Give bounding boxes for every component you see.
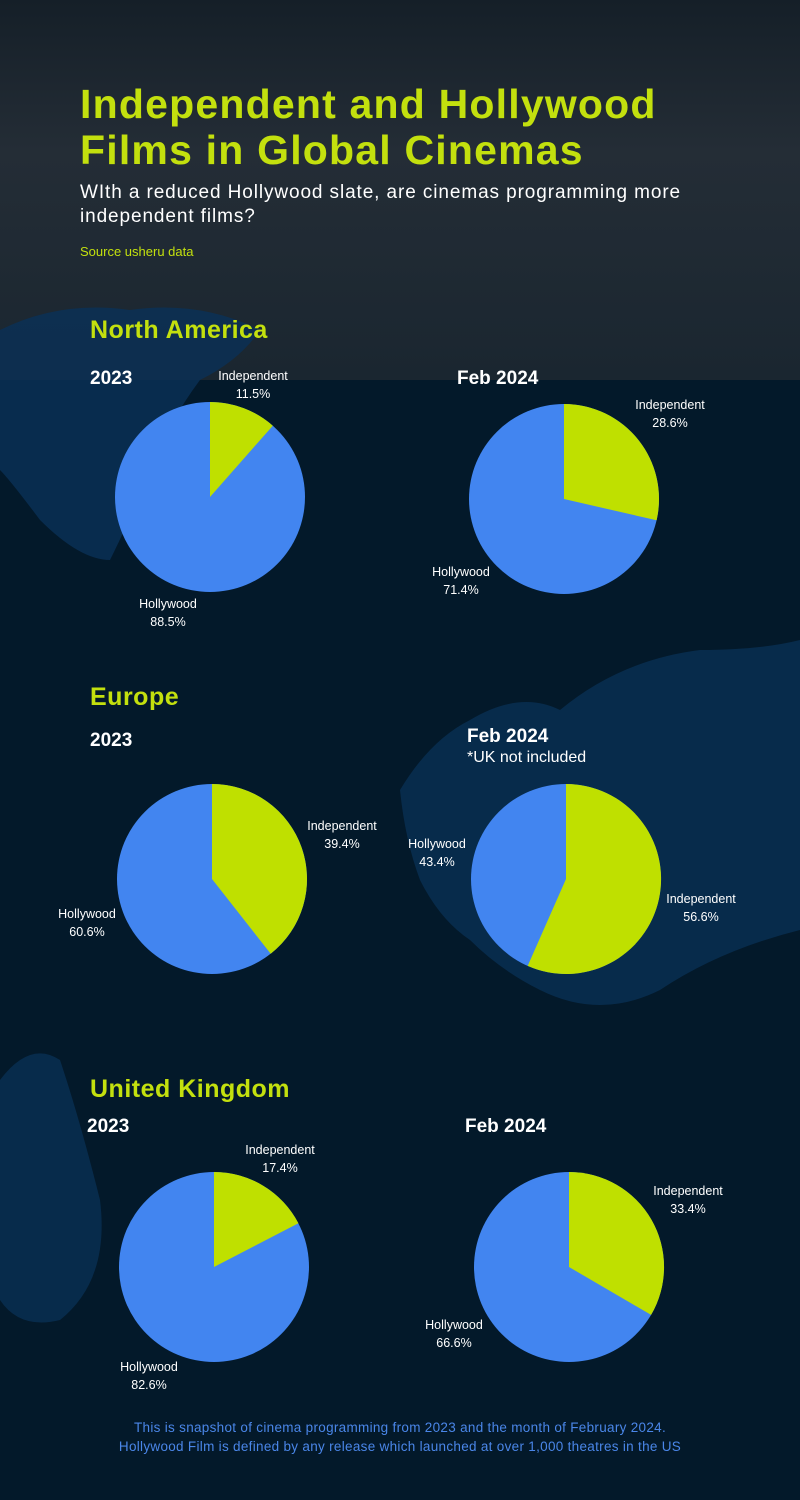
text: Independent	[307, 819, 377, 833]
subtitle: independent films?	[80, 206, 256, 227]
subtitle: WIth a reduced Hollywood slate, are cinemas programming more	[80, 182, 681, 203]
panel: United Kingdom: 2023	[87, 1116, 129, 1137]
source: Source usheru data	[80, 244, 193, 259]
text: 60.6%	[69, 925, 105, 939]
text: 39.4%	[324, 837, 360, 851]
labels: Independent	[218, 369, 288, 383]
text: 66.6%	[436, 1336, 472, 1350]
text: Independent	[245, 1143, 315, 1157]
footnote: Hollywood Film is defined by any release which launched at over 1,000 theatres in the US	[119, 1439, 681, 1454]
footnote	[119, 1420, 681, 1454]
text: 43.4%	[419, 855, 455, 869]
text: Hollywood	[425, 1318, 483, 1332]
panel: North America: 2023	[90, 368, 132, 389]
text: Independent	[653, 1184, 723, 1198]
text: Independent	[635, 398, 705, 412]
panel: Europe: *UK not included	[467, 749, 586, 766]
panel: Europe: Europe	[90, 683, 179, 711]
text: Hollywood	[139, 597, 197, 611]
subtitle	[80, 182, 681, 227]
header background	[0, 0, 800, 380]
panel: Europe: Feb 2024	[467, 726, 548, 747]
text: 82.6%	[131, 1378, 167, 1392]
title: Films in Global Cinemas	[80, 127, 584, 173]
text: Hollywood	[432, 565, 490, 579]
text: 88.5%	[150, 615, 186, 629]
panel: Europe: 2023	[90, 730, 132, 751]
text: Hollywood	[58, 907, 116, 921]
text: 28.6%	[652, 416, 688, 430]
text: 71.4%	[443, 583, 479, 597]
labels: 11.5%	[236, 387, 270, 401]
panel: United Kingdom: Feb 2024	[465, 1116, 546, 1137]
text: 56.6%	[683, 910, 719, 924]
text: Independent	[666, 892, 736, 906]
panel: North America: North America	[90, 316, 268, 344]
panel: North America	[90, 316, 538, 389]
panel: United Kingdom: United Kingdom	[90, 1075, 290, 1103]
footnote: This is snapshot of cinema programming from 2023 and the month of February 2024.	[134, 1420, 666, 1435]
title: Independent and Hollywood	[80, 81, 657, 127]
title	[80, 81, 657, 173]
panel: United Kingdom	[87, 1075, 546, 1137]
panel: Europe	[90, 683, 586, 766]
text: 33.4%	[670, 1202, 706, 1216]
text: 17.4%	[262, 1161, 298, 1175]
text: Hollywood	[408, 837, 466, 851]
panel: North America: Feb 2024	[457, 368, 538, 389]
labels	[218, 369, 288, 401]
text: Hollywood	[120, 1360, 178, 1374]
